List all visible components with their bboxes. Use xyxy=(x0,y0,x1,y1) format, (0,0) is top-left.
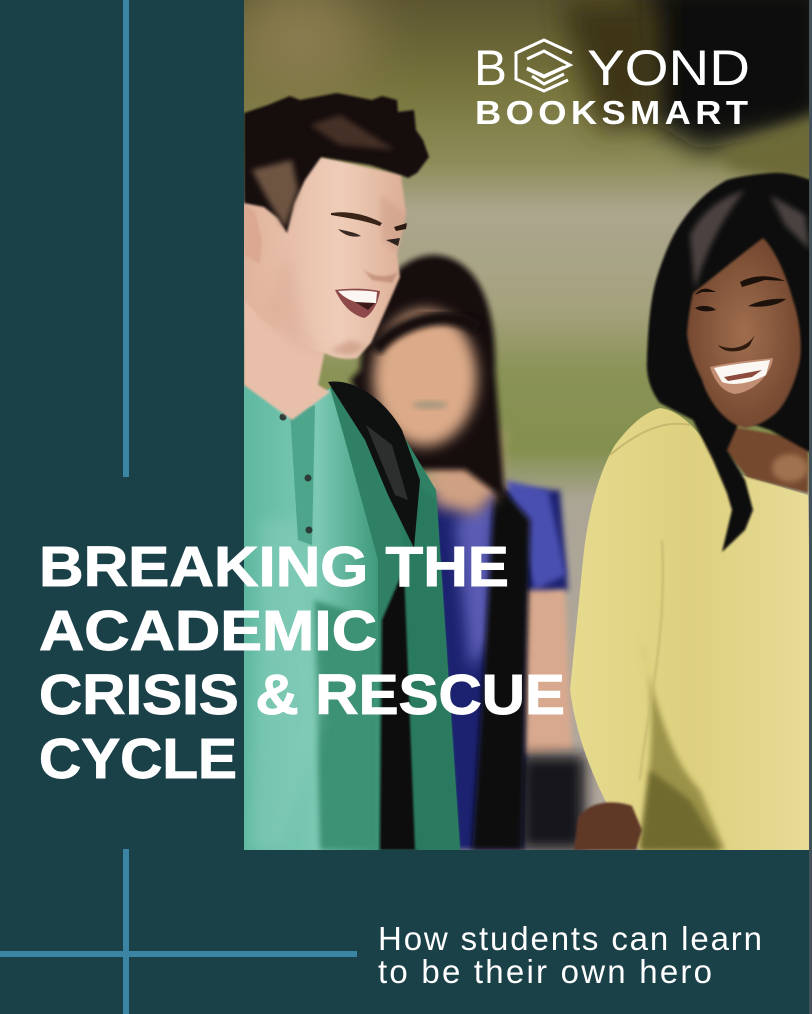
eyebrows and eyes xyxy=(331,212,382,226)
hair xyxy=(244,93,429,233)
eyebrows and eyes xyxy=(695,289,716,295)
title: CRISIS & RESCUE xyxy=(39,663,565,727)
subtitle xyxy=(378,920,762,990)
title: CYCLE xyxy=(39,727,237,791)
logo wordmark: beyond: YOND xyxy=(587,40,750,96)
face xyxy=(244,157,406,359)
decorative vertical rule, top xyxy=(123,0,129,477)
boy in mint shirt xyxy=(244,93,460,850)
subtitle: to be their own hero xyxy=(378,953,712,990)
mint shirt xyxy=(244,385,460,850)
smile xyxy=(710,358,773,394)
hand xyxy=(574,802,642,850)
icon: hexagon with stacked book chevrons xyxy=(516,40,572,91)
blurred girl in the background xyxy=(350,255,585,850)
logo: Beyond BookSmart xyxy=(474,40,752,132)
face xyxy=(687,238,801,428)
ear xyxy=(244,205,262,264)
nose xyxy=(718,335,755,351)
nose shadow xyxy=(364,270,398,284)
subtitle: How students can learn xyxy=(378,920,762,957)
photo: three laughing students xyxy=(230,0,812,850)
black hair xyxy=(647,173,812,552)
blurred background xyxy=(230,0,812,850)
logo wordmark: beyond: B xyxy=(474,40,507,96)
neck xyxy=(722,425,808,493)
logo wordmark: booksmart: BOOKSMART xyxy=(475,95,752,132)
title xyxy=(39,535,565,791)
girl in yellow sweater xyxy=(570,173,812,850)
neck xyxy=(244,240,330,420)
title: ACADEMIC xyxy=(39,599,377,663)
title: BREAKING THE xyxy=(39,535,509,599)
sweater xyxy=(570,408,812,850)
logo wordmark: beyond xyxy=(474,40,750,96)
backpack strap xyxy=(328,382,420,548)
decorative cross rule, bottom xyxy=(0,849,357,1014)
right edge strip xyxy=(809,0,812,1014)
mouth xyxy=(335,289,380,318)
placket and buttons xyxy=(290,405,315,545)
